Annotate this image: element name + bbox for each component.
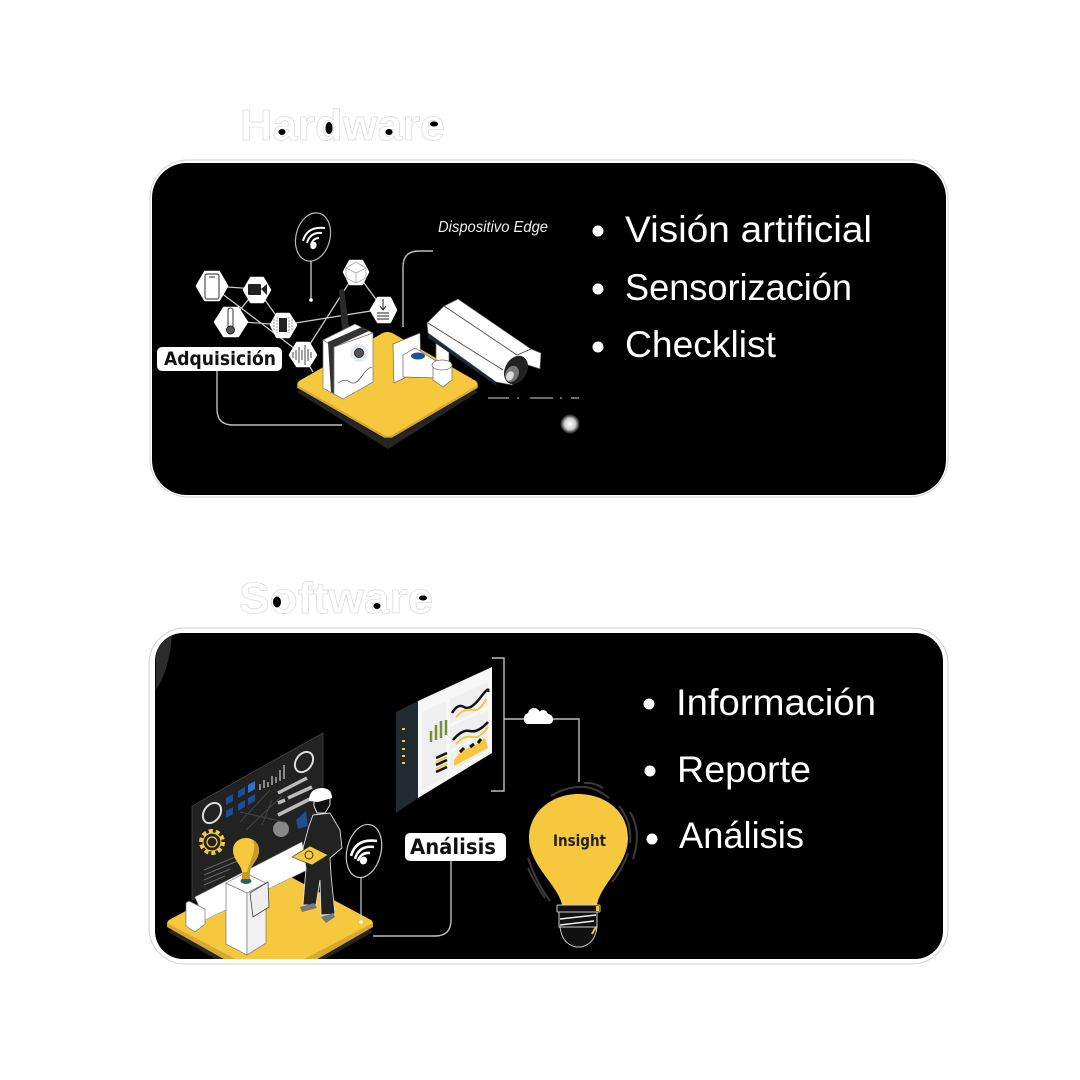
list: hardware bullets: Visión artificial [625, 209, 872, 250]
icon: cube hexagon [344, 261, 368, 284]
label: Adquisición [157, 347, 342, 425]
icon: vibration hexagon [271, 314, 296, 337]
icon: wifi sensor pin [291, 209, 335, 302]
icon: camera hexagon [244, 278, 270, 302]
reporting dashboard [396, 667, 492, 813]
heading: Software: Software [239, 574, 433, 623]
icon: insight bulb [528, 783, 637, 947]
list: software bullets: Reporte [677, 749, 811, 790]
icon: wifi sensor pin [346, 824, 382, 924]
label: Análisis [373, 833, 506, 936]
list: software bullets: Información [676, 682, 876, 723]
list: software bullets [644, 682, 876, 856]
icon: edge device box [323, 289, 373, 399]
icon: thermometer hexagon [215, 308, 247, 336]
panel: software [149, 628, 948, 990]
icon: level gauge hexagon [371, 298, 396, 322]
bracket and cloud connector [491, 658, 579, 791]
list: hardware bullets [592, 209, 872, 365]
icon: security camera [393, 251, 541, 388]
white wall bench [186, 842, 307, 932]
icon: phone hexagon [197, 272, 227, 300]
sensor network lines [212, 272, 383, 372]
list: hardware bullets: Checklist [625, 324, 777, 365]
illustration: operator station [167, 732, 382, 959]
icon: insight bulb: Insight [553, 831, 606, 850]
label: Adquisición: Adquisición [164, 348, 276, 370]
label: Análisis: Análisis [410, 835, 496, 859]
dashboard wall screen [192, 733, 323, 900]
list: software bullets: Análisis [679, 815, 804, 856]
platform: yellow base [167, 878, 373, 959]
worker with tablet [292, 788, 342, 923]
label: Dispositivo Edge: Dispositivo Edge [438, 219, 548, 236]
list: hardware bullets: Sensorización [625, 267, 852, 308]
icon: sound wave hexagon [290, 343, 316, 366]
heading: Hardware: Hardware [240, 101, 445, 150]
platform: yellow base [297, 332, 478, 449]
dashed signal and glow dot [488, 398, 580, 434]
pedestal with bulb [226, 838, 269, 955]
panel: hardware [150, 160, 948, 497]
